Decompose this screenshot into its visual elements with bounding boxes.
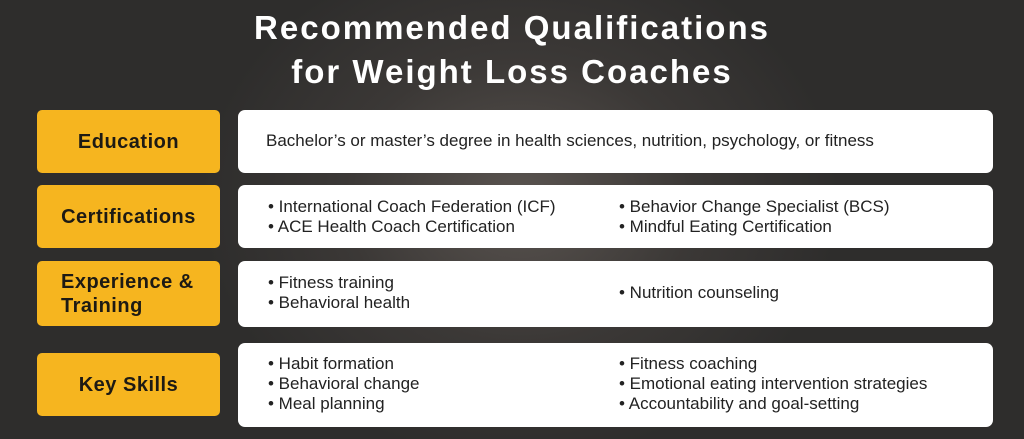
title: for Weight Loss Coaches [291,53,733,90]
panel: key skills: • Meal planning [268,394,385,413]
panel: education: Bachelor’s or master’s degree in health sciences, nutrition, psychology, or fitness [266,131,874,150]
panel: certifications: • International Coach Federation (ICF) [268,197,556,216]
panel: education [238,110,993,173]
label: education [37,110,220,173]
panel: key skills [238,343,993,427]
panel: experience: • Nutrition counseling [619,283,779,302]
label: experience: Training [61,294,143,316]
panel: certifications: • Mindful Eating Certification [619,217,832,236]
title: Recommended Qualifications [254,9,770,46]
panel: key skills: • Habit formation [268,354,394,373]
label: certifications: Certifications [61,206,196,228]
panel: certifications: • ACE Health Coach Certification [268,217,515,236]
panel: experience [238,261,993,327]
panel: certifications: • Behavior Change Specialist (BCS) [619,197,890,216]
panel: experience: • Fitness training [268,273,394,292]
panel: key skills: • Behavioral change [268,374,420,393]
panel: key skills: • Accountability and goal-setting [619,394,859,413]
label: experience: Experience & [61,270,194,292]
panel: certifications [238,185,993,248]
title [254,9,770,90]
label: key skills [37,353,220,416]
panel: key skills: • Fitness coaching [619,354,757,373]
label: certifications [37,185,220,248]
label: experience [37,261,220,326]
label: education: Education [78,130,179,152]
panel: key skills: • Emotional eating intervention strategies [619,374,927,393]
label: key skills: Key Skills [79,374,178,396]
panel: experience: • Behavioral health [268,293,410,312]
